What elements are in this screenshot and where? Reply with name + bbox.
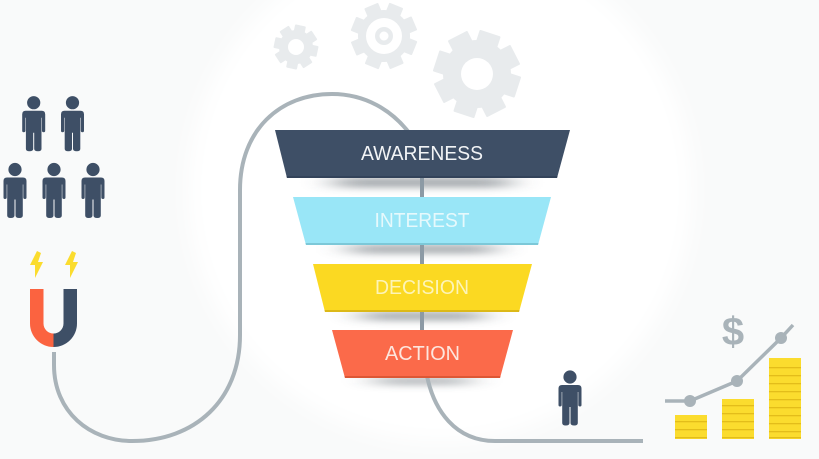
dollar sign: $ [722,310,744,354]
person [61,96,84,151]
revenue chart [665,310,801,439]
coin bar small [675,415,707,439]
icon: small gear [270,21,322,73]
stage: action: ACTION [385,343,460,365]
connector curve from magnet to funnel [54,94,410,441]
connector curve from funnel to floor [427,376,643,441]
icon: large gear [423,20,531,128]
funnel shadows [335,178,509,384]
person [82,163,104,218]
icon: customer [558,370,582,426]
person [4,163,26,218]
icon: lightning bolts [30,251,78,278]
stage: action [332,330,513,378]
coin bar large [769,358,801,439]
icon: medium gear [341,0,427,79]
trend line [665,325,793,407]
stage: decision: DECISION [375,277,469,299]
icon: group of people [4,96,104,218]
stage: interest [293,197,551,245]
person [42,163,66,218]
stage: awareness [275,130,570,178]
coin bar medium [722,399,754,439]
stage: awareness: AWARENESS [361,143,483,165]
stage: decision [313,264,532,312]
person [22,96,45,151]
funnel [275,130,570,378]
icon: magnet [30,289,77,347]
connector line through funnel [420,178,424,332]
stage: interest: INTEREST [374,210,470,232]
